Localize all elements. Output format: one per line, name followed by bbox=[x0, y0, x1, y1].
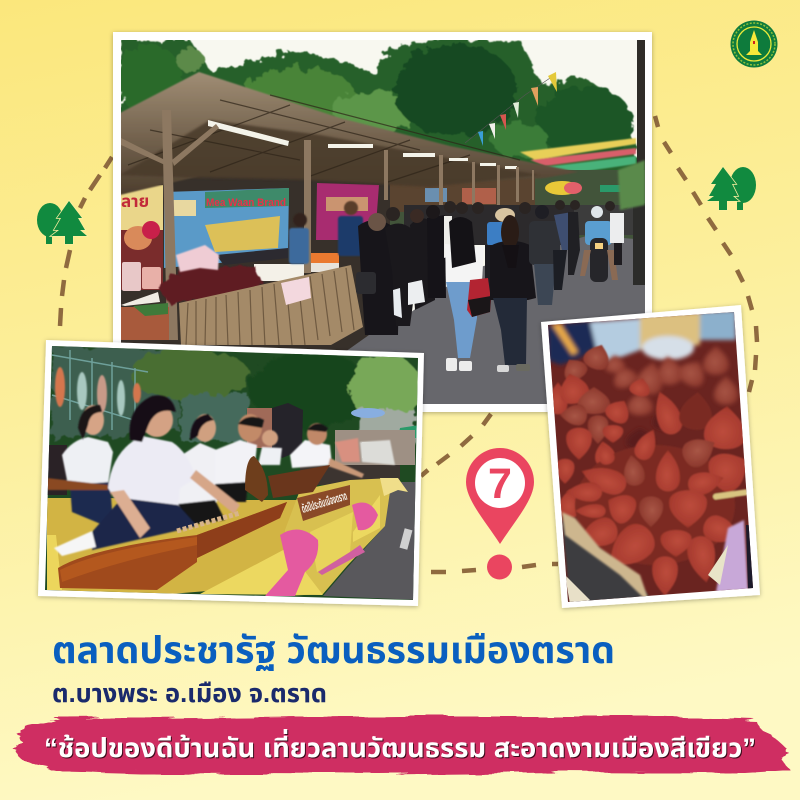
sailor girl bbox=[177, 443, 217, 508]
stall back bbox=[121, 170, 390, 352]
building edge right bbox=[637, 40, 645, 170]
bin and plants bbox=[633, 203, 645, 285]
brush banner bbox=[14, 716, 790, 774]
students bbox=[47, 395, 395, 556]
crowd bbox=[356, 160, 645, 372]
yellow table cloth bbox=[200, 478, 408, 596]
red bag bbox=[467, 278, 491, 317]
motorbike rider bbox=[585, 221, 612, 245]
posters bbox=[121, 183, 379, 291]
black dress woman bbox=[358, 220, 399, 335]
heads bbox=[444, 200, 629, 214]
photo: thai music ensemble: ดัดปีประดับเมืองตราด bbox=[300, 489, 349, 516]
left girl bbox=[62, 437, 113, 485]
icon: trees left bbox=[37, 201, 87, 244]
star cluster of salak bbox=[566, 387, 757, 596]
white shirt woman bbox=[445, 244, 484, 282]
road bbox=[323, 482, 420, 600]
logo bbox=[730, 20, 778, 68]
slogan: “ช้อปของดีบ้านฉัน เที่ยวลานวัฒนธรรม สะอาดงามเมืองสีเขียว” bbox=[44, 729, 756, 763]
bunting bbox=[465, 72, 636, 174]
roof bbox=[120, 72, 578, 195]
thatch fringe bbox=[179, 265, 363, 345]
lights bbox=[208, 120, 517, 169]
ground bbox=[347, 236, 645, 404]
rambutan and stall goods bbox=[121, 245, 339, 340]
fence and lanterns bbox=[52, 350, 150, 430]
sign bbox=[297, 485, 350, 521]
icon: location pin 7 bbox=[466, 448, 534, 580]
blue shirt and hat bbox=[487, 222, 503, 245]
posts bbox=[121, 110, 534, 340]
black top woman bbox=[490, 241, 536, 300]
dashed route bbox=[60, 116, 757, 572]
line of people bbox=[390, 224, 414, 326]
left fruit pile bbox=[549, 340, 653, 518]
boy right bbox=[290, 440, 332, 468]
mid background behind crowd bbox=[385, 170, 645, 240]
background stage items bbox=[47, 403, 420, 495]
photo: thai music ensemble bbox=[38, 340, 424, 606]
posters: ลาย bbox=[121, 192, 149, 211]
back fruit pile bbox=[605, 346, 738, 450]
man dark shirt bbox=[529, 221, 560, 265]
location line: ต.บางพระ อ.เมือง จ.ตราด bbox=[52, 678, 327, 708]
photo: market stalls bbox=[113, 32, 652, 412]
vendors bbox=[289, 201, 363, 264]
instruments bbox=[58, 456, 350, 590]
front girl bbox=[108, 436, 196, 508]
yellow mat bbox=[47, 498, 300, 594]
posters: Mea Waan Brand bbox=[206, 197, 286, 209]
boy bbox=[215, 440, 257, 485]
pink ribbons bbox=[265, 530, 318, 596]
icon: trees right bbox=[707, 167, 756, 210]
title: ตลาดประชารัฐ วัฒนธรรมเมืองตราด bbox=[52, 630, 615, 671]
blurred backdrop bbox=[548, 310, 736, 365]
icon: location pin 7: 7 bbox=[488, 460, 512, 508]
photo: fruit bbox=[540, 305, 760, 608]
bamboo and cloth bbox=[562, 512, 760, 604]
trees bbox=[121, 40, 637, 170]
